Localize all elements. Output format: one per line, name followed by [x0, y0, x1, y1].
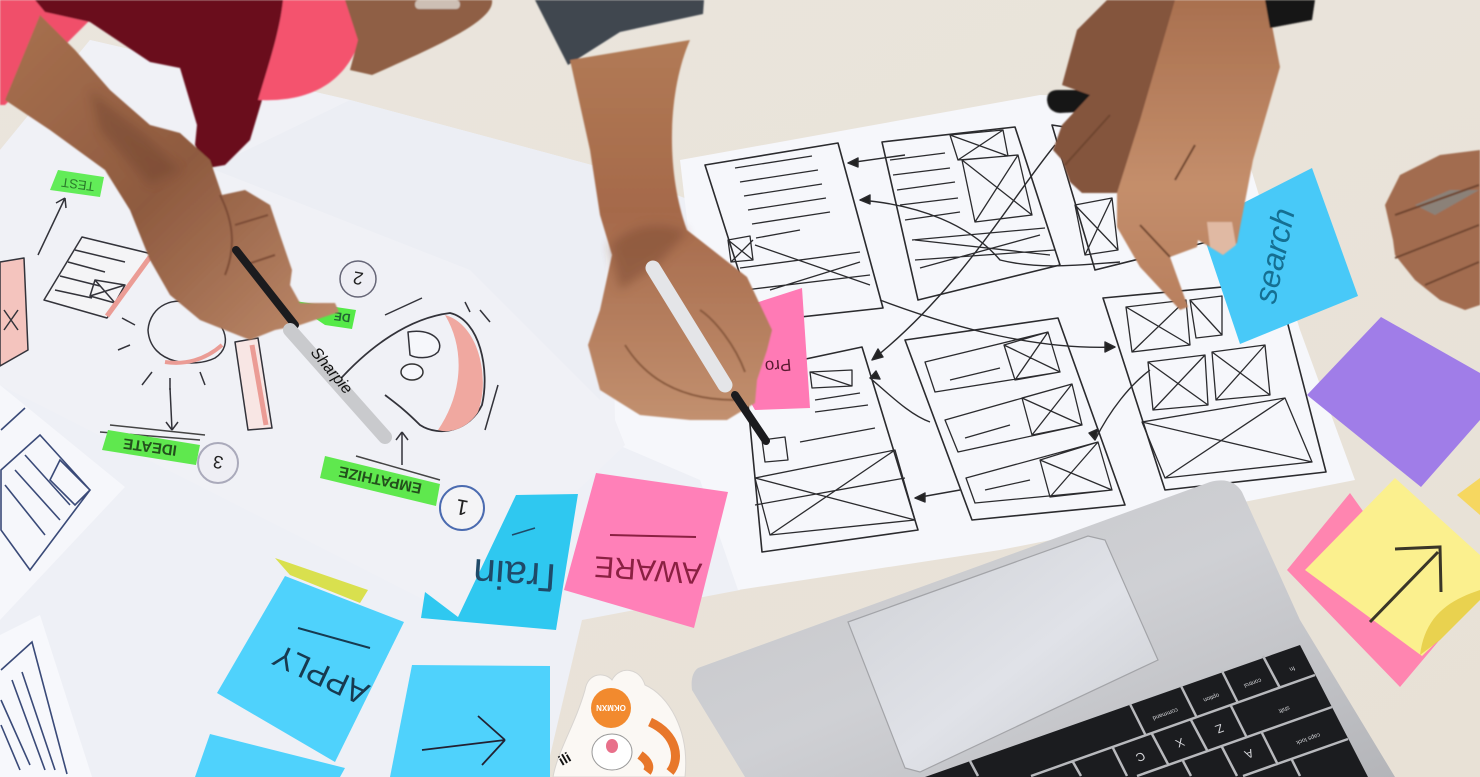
- laptop keyboard: A: [1242, 746, 1256, 761]
- sticky note: blue APPLY: APPLY: [267, 637, 374, 712]
- sticker: mascot: ili: [556, 749, 574, 769]
- left sheet sketch: [0, 198, 498, 480]
- person: center arm writing: [535, 0, 772, 420]
- laptop: [692, 480, 1395, 777]
- person: marker in left hand: Sharpie: [307, 344, 355, 398]
- sketch: pencil: [235, 338, 272, 430]
- sticky note: yellow under apply: [275, 558, 368, 603]
- laptop keyboard: control: [1243, 676, 1262, 688]
- sketch: up arrow: [38, 198, 66, 255]
- sticky note: orange corner: [1457, 478, 1480, 515]
- paper: right wireframe sheet: [560, 95, 1355, 590]
- wireframe: top-right screen: [1052, 125, 1215, 270]
- highlighter label: IDEATE: IDEATE: [122, 434, 178, 459]
- wireframe: top-left screen: [705, 143, 883, 322]
- laptop keyboard: option: [1202, 691, 1220, 702]
- highlighter label: EMPATHIZE: [320, 456, 440, 506]
- paper: left sheet with design thinking sketch: [0, 40, 625, 617]
- sticker: mascot: OKMXN: [596, 703, 626, 712]
- sketch: heart shape: [335, 298, 498, 431]
- paper: bottom-left corner wireframe sheet: [0, 615, 92, 777]
- wireframe: top-middle screen: [882, 127, 1060, 300]
- laptop keyboard: fn: [1288, 664, 1296, 671]
- number badge 3: [198, 443, 238, 483]
- number badge 1: 1: [454, 494, 470, 521]
- sticky note: cyan holding: search: [1247, 205, 1302, 306]
- laptop keyboard: Z: [1213, 721, 1226, 736]
- laptop keyboard: command: [1151, 706, 1179, 720]
- sticky note: pink under hand: Pro: [764, 355, 792, 376]
- person: marker in center hand: [653, 268, 766, 441]
- flow arrows between screens: [848, 145, 1150, 502]
- laptop keyboard: shift: [1277, 704, 1290, 713]
- wireframe: center screen: [905, 318, 1125, 520]
- highlighter label: TEST: TEST: [60, 175, 95, 194]
- sticker: mascot: [553, 670, 686, 777]
- sticky note: pink under hand: [703, 288, 810, 410]
- wireframe: right screen: [1103, 282, 1326, 490]
- sticky note: blue Training: [421, 494, 578, 630]
- highlighter label: IDEATE: [102, 430, 200, 465]
- number badge 2: 2: [352, 267, 365, 289]
- person: marker in left hand: [236, 250, 385, 437]
- sticky note: blue APPLY: [217, 576, 404, 762]
- paper: far-left wireframe sheet: [0, 385, 125, 620]
- sticky note: blue bottom: [195, 734, 345, 777]
- wireframe: bottom-left screen: [745, 347, 918, 552]
- sticky note: blue Training: Train: [472, 550, 564, 600]
- sketch: left edge fragment: [0, 258, 28, 366]
- sketch: wireframe card: [44, 237, 152, 318]
- number badge 1: [440, 486, 484, 530]
- laptop keyboard: caps lock: [1295, 731, 1321, 745]
- wireframe sketches: [705, 125, 1326, 552]
- sticky note: purple: [1307, 317, 1480, 487]
- laptop keyboard: [925, 645, 1368, 777]
- laptop trackpad: [848, 536, 1158, 772]
- laptop keyboard: X: [1173, 735, 1187, 750]
- highlighter label: EMPATHIZE: EMPATHIZE: [337, 462, 423, 497]
- sketch: down and up arrows: [166, 388, 408, 465]
- sticky note: blue arrow: [390, 665, 550, 777]
- highlighter label: DEFINE: [288, 300, 356, 329]
- person: top-left arm with red shirt: [0, 0, 492, 340]
- highlighter label: TEST: [50, 170, 104, 197]
- number badge 3: 3: [212, 451, 225, 473]
- sticky note: cyan holding: [1200, 168, 1358, 344]
- sticky note: pink AWARE: AWARE: [593, 549, 703, 590]
- paper: bottom-left sheet base: [0, 40, 740, 777]
- sketch: label underlines: [100, 425, 440, 480]
- number badge 2: [340, 261, 376, 297]
- laptop keyboard: C: [1133, 749, 1148, 765]
- sketch: lightbulb head: [118, 301, 225, 390]
- sticky note: yellow arrow: [1305, 478, 1480, 656]
- highlighter label: DEFINE: DE: [333, 309, 351, 325]
- sticky note: pink AWARE: [564, 473, 728, 628]
- person: far-right hand: [1385, 150, 1480, 310]
- person: top-right hand: [1047, 0, 1315, 310]
- sticky note: pink stack: [1287, 493, 1448, 687]
